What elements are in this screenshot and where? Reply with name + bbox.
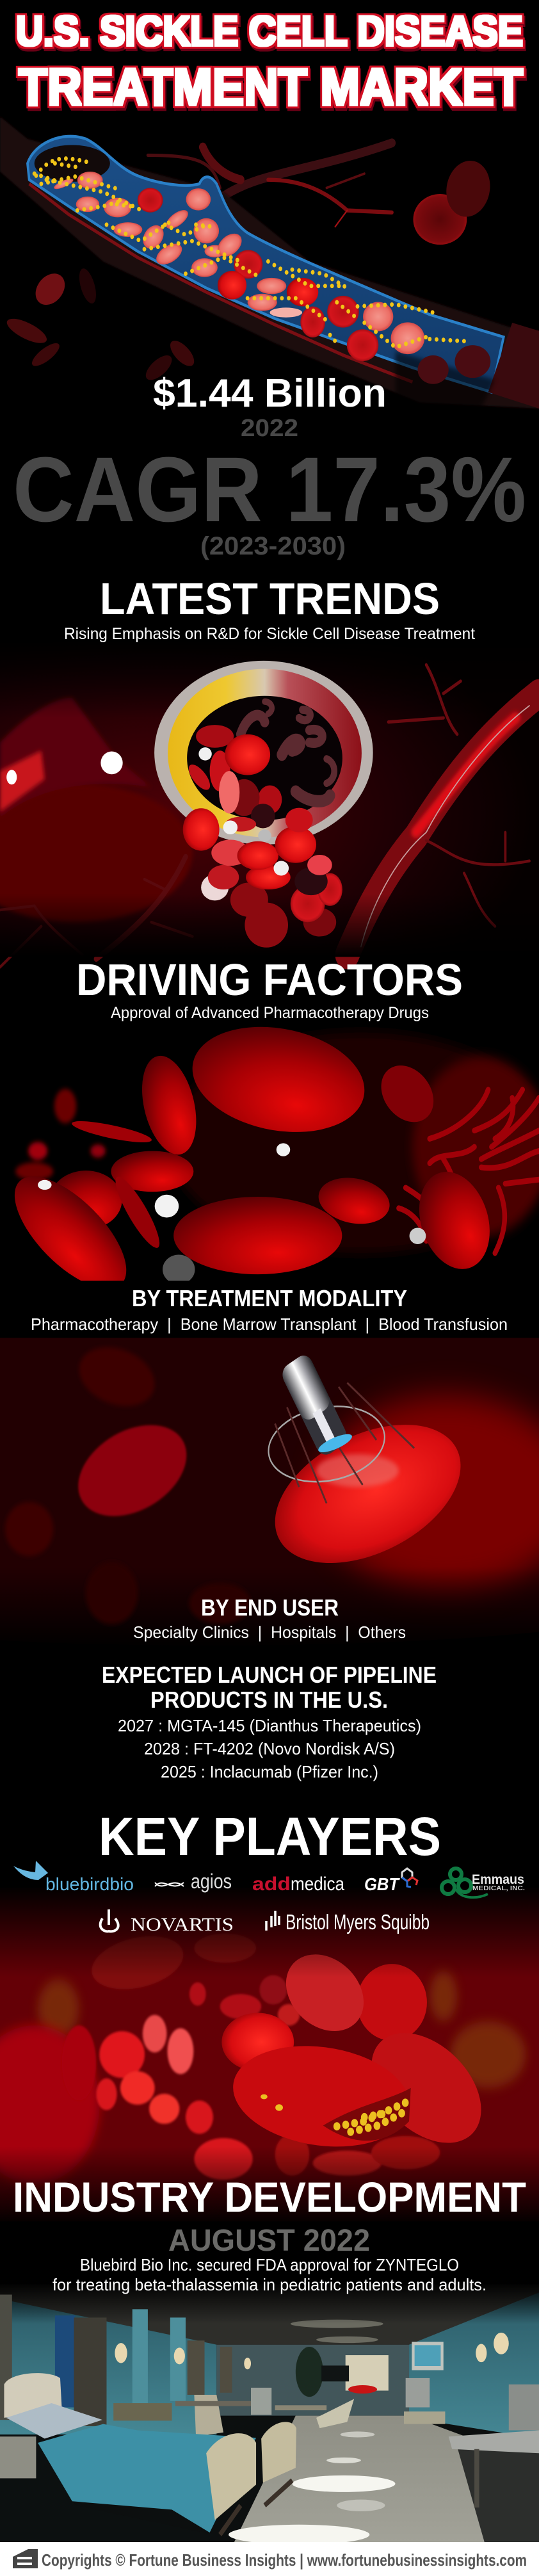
tree xyxy=(296,2347,323,2397)
heading: pipeline products xyxy=(102,1662,437,1713)
red flowers xyxy=(348,2385,377,2394)
curtains and window xyxy=(0,2295,232,2426)
pipeline list: 2025 : Inclacumab (Pfizer Inc.) xyxy=(161,1762,378,1781)
bedside table xyxy=(0,2436,36,2478)
logo: Emmaus Medical xyxy=(442,1868,525,1897)
development text: Bluebird Bio Inc. secured FDA approval for ZYNTEGLO xyxy=(80,2255,459,2274)
top fade xyxy=(0,640,539,718)
right equipment table xyxy=(449,2385,539,2507)
pipeline list: 2027 : MGTA-145 (Dianthus Therapeutics) xyxy=(118,1716,421,1735)
heading: key players: KEY PLAYERS xyxy=(99,1806,441,1867)
market size year: 2022 xyxy=(241,415,298,442)
dark lumen upper left xyxy=(35,145,110,182)
bed base xyxy=(0,2438,213,2543)
bottom fade xyxy=(0,2146,539,2226)
bed headboard xyxy=(4,2373,62,2418)
nanorobot xyxy=(264,1352,414,1503)
dark red backdrop xyxy=(0,640,539,955)
illustration: cell with yellow particles xyxy=(0,1886,539,2226)
treatment modality list: Pharmacotherapy | Bone Marrow Transplant | Blood Transfusion xyxy=(31,1315,508,1334)
development date: AUGUST 2022 xyxy=(168,2224,370,2258)
back window xyxy=(346,2355,389,2391)
illustration: nanorobot on red blood cell xyxy=(0,1338,539,1648)
cascade of red cells xyxy=(183,725,342,948)
illustration: sickle cells spilling from vessel xyxy=(0,640,539,967)
wainscot band xyxy=(113,2403,172,2420)
wall columns xyxy=(133,2309,186,2405)
right branching vessel xyxy=(347,665,539,955)
background glow xyxy=(0,1338,539,1646)
ward base xyxy=(0,2284,539,2543)
yellow haze xyxy=(38,1971,526,2088)
logo: Novartis xyxy=(101,1909,234,1935)
development text xyxy=(52,2255,487,2294)
CAGR period: (2023-2030) xyxy=(200,532,346,560)
vessel cut-away interior xyxy=(28,136,504,392)
end user list: Specialty Clinics | Hospitals | Others xyxy=(133,1623,406,1642)
streak highlight xyxy=(0,750,45,812)
dark cell texture xyxy=(168,1032,539,1253)
logos xyxy=(13,1861,525,1935)
vessel branches xyxy=(148,143,392,227)
blurred small cells xyxy=(62,1975,440,2180)
logo: agios: agios xyxy=(191,1870,232,1893)
yellow particles xyxy=(337,2103,406,2132)
wall lamps xyxy=(115,2333,509,2369)
illustration: hospital ward xyxy=(0,2282,539,2545)
bed wheels xyxy=(220,2481,292,2534)
logo: Emmaus Medical: Emmaus xyxy=(472,1872,524,1887)
pipeline list: 2028 : FT-4202 (Novo Nordisk A/S) xyxy=(144,1739,395,1758)
heading: latest trends: LATEST TRENDS xyxy=(100,574,440,624)
footer xyxy=(0,2542,539,2576)
vessel outer wall xyxy=(0,117,539,409)
band behind treatment modality xyxy=(0,1281,539,1337)
driving factors text: Approval of Advanced Pharmacotherapy Drugs xyxy=(111,1004,429,1022)
logo: addmedica xyxy=(252,1874,344,1895)
sickled cell mass right xyxy=(399,1090,539,1253)
blurred distant cells xyxy=(15,1089,106,1180)
latest trends text: Rising Emphasis on R&D for Sickle Cell Disease Treatment xyxy=(64,625,475,643)
logo: bluebird bio: bluebirdbio xyxy=(45,1874,134,1894)
red blood cells inside vessel xyxy=(53,172,490,384)
floor dark right xyxy=(457,2447,539,2543)
logo: addmedica: add xyxy=(252,1874,291,1895)
large dark cell left xyxy=(0,783,193,922)
small yellow dots on cell xyxy=(261,2094,283,2111)
mid chairs and tables xyxy=(175,2378,445,2436)
right glow xyxy=(316,1395,539,1591)
bed footboards xyxy=(206,2433,256,2520)
heading: pipeline products: PRODUCTS IN THE U.S. xyxy=(150,1687,388,1713)
right wall xyxy=(409,2292,539,2438)
pipeline list xyxy=(118,1716,421,1781)
white blobs left xyxy=(6,752,123,784)
heading: driving factors: DRIVING FACTORS xyxy=(76,955,463,1005)
logo: GBT: GBT xyxy=(364,1874,401,1894)
logo: bluebird bio xyxy=(13,1861,134,1894)
logo: GBT xyxy=(364,1868,417,1894)
top fade xyxy=(0,1886,539,1977)
sharp red cells xyxy=(221,1940,497,2166)
footer logo xyxy=(13,2549,38,2568)
logo: Emmaus Medical: MEDICAL, INC. xyxy=(472,1885,525,1892)
logo: Bristol Myers Squibb xyxy=(266,1910,430,1934)
ceiling xyxy=(0,2284,539,2345)
left red mass xyxy=(0,2025,100,2184)
development text: for treating beta-thalassemia in pediatric patients and adults. xyxy=(52,2275,487,2294)
floor xyxy=(234,2416,539,2543)
bed mattress xyxy=(38,2424,256,2532)
title xyxy=(16,7,523,117)
blurred cells xyxy=(5,1338,251,1624)
heading: by treatment modality: BY TREATMENT MODALITY xyxy=(132,1285,407,1311)
sharp red cells xyxy=(0,1015,503,1309)
illustration: blood vessel cross-section xyxy=(0,117,539,409)
market size value: $1.44 Billion xyxy=(153,371,387,416)
illustration: red blood cells xyxy=(0,1015,539,1309)
vessel lower wall highlight xyxy=(29,184,412,382)
left wall xyxy=(0,2299,216,2434)
vessel end fade xyxy=(396,352,495,409)
lower-left branching vessel xyxy=(0,857,193,967)
yellow particle cut-out xyxy=(323,2088,411,2141)
white platelets xyxy=(198,747,289,875)
right red haze xyxy=(412,1057,539,1236)
sickled cells inside xyxy=(241,702,334,801)
bottom fade xyxy=(0,1567,539,1648)
logo: agios xyxy=(155,1870,232,1893)
heading: pipeline products: EXPECTED LAUNCH OF PIPELINE xyxy=(102,1662,437,1688)
cell highlight xyxy=(316,1454,399,1487)
logo: Bristol Myers Squibb: Bristol Myers Squibb xyxy=(286,1910,430,1934)
yellow particles xyxy=(35,159,464,347)
white platelets xyxy=(38,1143,426,1284)
vessel right end cap xyxy=(488,323,539,409)
upper-left vessel streak xyxy=(0,697,151,818)
monitor xyxy=(412,2342,444,2370)
robot capsule xyxy=(279,1352,350,1459)
TV screen xyxy=(321,2365,349,2381)
logo: addmedica: medica xyxy=(291,1874,344,1895)
bed pillow xyxy=(6,2403,102,2438)
floating blood cells left xyxy=(4,266,198,385)
hospital bed xyxy=(0,2373,296,2543)
vessel cross-section ring xyxy=(154,661,373,845)
floating blood cells right xyxy=(413,152,497,245)
heading: by end user: BY END USER xyxy=(201,1594,339,1621)
upper dim cells xyxy=(88,1928,256,1997)
back wall xyxy=(216,2345,409,2416)
logo: Novartis: NOVARTIS xyxy=(131,1915,234,1935)
red backdrop xyxy=(0,1888,539,2221)
floor highlights xyxy=(229,2431,396,2545)
ceiling panels xyxy=(291,2320,383,2343)
bottom fade xyxy=(0,894,539,957)
robot ring xyxy=(264,1398,389,1490)
large red cell xyxy=(259,1398,476,1590)
robot glow xyxy=(317,1430,353,1456)
ceiling fade xyxy=(0,2282,539,2324)
robot legs xyxy=(275,1383,414,1503)
